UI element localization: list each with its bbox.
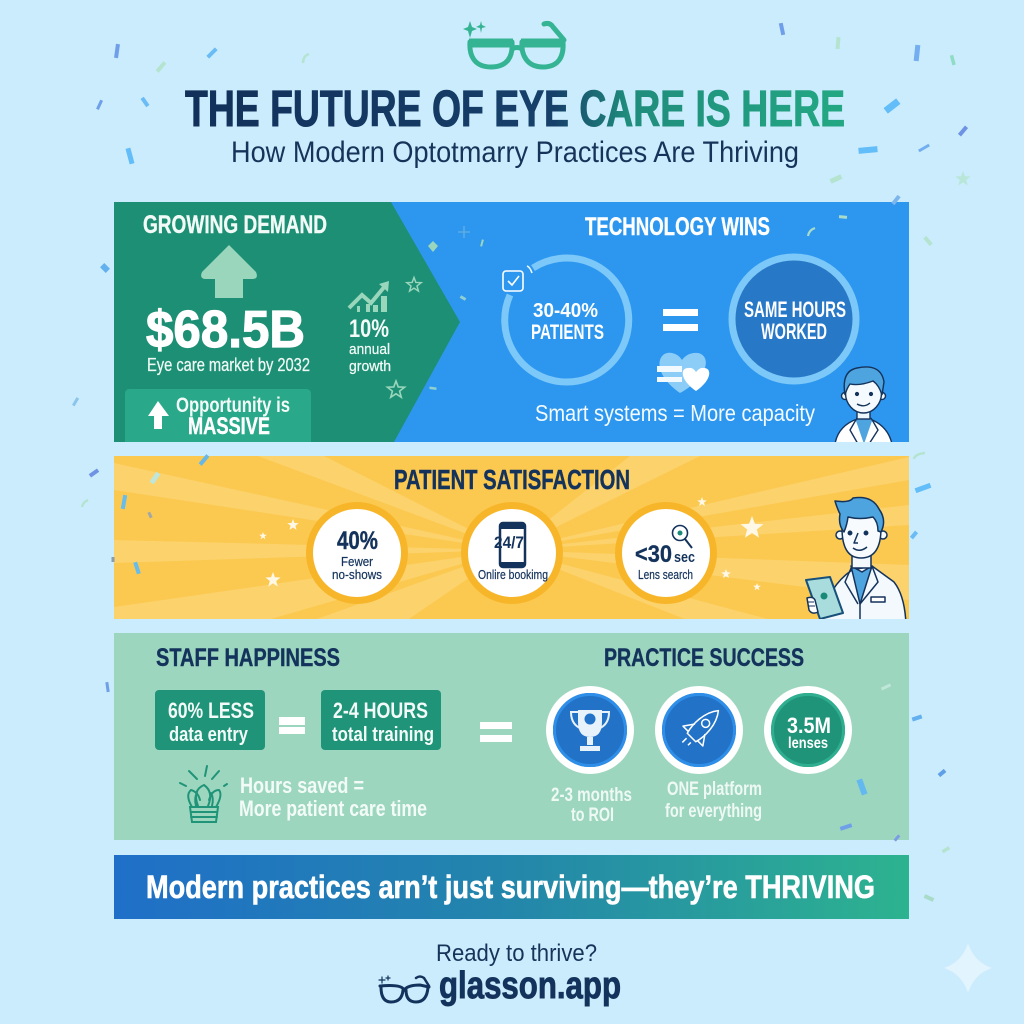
stat box: 60% less data entry [155, 690, 265, 750]
caption: one platform: for everything [665, 801, 762, 822]
equals sign [279, 717, 305, 734]
caption: months to ROI: to ROI [571, 805, 614, 826]
stat: market size: $68.5B [146, 301, 305, 359]
stat circle: online booking: 24/7 [494, 533, 524, 552]
caption: market by 2032: Eye care market by 2032 [147, 355, 310, 375]
icon: outline stars [387, 278, 421, 397]
equals sign [480, 722, 512, 742]
caption: months to ROI [551, 785, 632, 826]
circle: same hours worked [732, 257, 856, 381]
footer prompt: Ready to thrive? [436, 940, 597, 967]
heading: patient satisfaction: PATIENT SATISFACTION [394, 464, 630, 495]
callout: opportunity is massive [125, 389, 311, 442]
stat circle: lens search [618, 506, 714, 600]
circle: same hours worked: WORKED [761, 319, 827, 344]
icon: rocket badge [658, 690, 740, 770]
caption: one platform: ONE platform [667, 779, 762, 800]
equals sign [663, 309, 698, 331]
stat box: 60% less data entry: data entry [169, 724, 249, 746]
caption: months to ROI: 2-3 months [551, 785, 632, 806]
stat box: total training: 2-4 HOURS [333, 698, 428, 723]
stat: annual growth [349, 315, 391, 375]
heading: growing demand: GROWING DEMAND [143, 211, 327, 239]
panel: growing demand and technology wins [114, 202, 909, 444]
circle: 30-40% patients [503, 258, 629, 382]
panel: technology wins background [114, 202, 909, 442]
decorative sparkle [944, 943, 992, 993]
caption: one platform [665, 779, 762, 822]
panel: growing demand chevron [114, 202, 460, 442]
icon: footer glasses [379, 976, 429, 1002]
stat circle: lens search: Lens search [638, 567, 693, 582]
caption: hours saved: Hours saved = [240, 773, 364, 798]
panel: staff happiness and practice success [114, 633, 909, 840]
stat badge: 3.5M lenses: lenses [788, 735, 828, 752]
stat badge: 3.5M lenses [768, 690, 848, 770]
glasses logo icon [463, 21, 564, 67]
sunburst rays [114, 456, 909, 625]
heading: technology wins: TECHNOLOGY WINS [585, 213, 770, 241]
caption: hours saved: More patient care time [239, 796, 427, 821]
stat circle: online booking [464, 506, 560, 600]
stat box: total training [321, 690, 441, 750]
confetti [72, 23, 968, 902]
heading: practice success: PRACTICE SUCCESS [604, 644, 804, 672]
stat circle: lens search: <30 [635, 541, 672, 568]
stat: annual growth: annual [349, 341, 390, 358]
banner: thriving message [114, 855, 909, 919]
caption: smart systems: Smart systems = More capacity [535, 400, 815, 426]
stat circle: online booking: Onlire bookimg [478, 567, 548, 582]
subtitle: How Modern Optotmarry Practices Are Thriving [231, 136, 799, 169]
stat circle: fewer no-shows [310, 506, 404, 600]
footer brand: glasson.app [439, 965, 621, 1007]
stat box: total training: total training [332, 724, 434, 746]
stat: annual growth: 10% [349, 315, 389, 343]
illustration: doctor with tablet [806, 497, 906, 625]
circle: same hours worked: SAME HOURS [744, 297, 846, 322]
panel background [114, 456, 909, 619]
icon: up arrow [201, 245, 257, 298]
callout: opportunity is massive: Opportunity is [176, 394, 290, 417]
panel background [114, 633, 909, 840]
circle: 30-40% patients: PATIENTS [531, 321, 604, 344]
icon: small doctor [835, 367, 892, 444]
decorative stars [259, 497, 763, 590]
stat: annual growth: growth [349, 358, 391, 375]
callout: opportunity is massive: MASSIVE [188, 413, 270, 440]
banner: thriving message: Modern practices arn’t just surviving—they’re THRIVING [146, 869, 875, 905]
icon: celebrating plant pot [180, 766, 227, 822]
icon: trophy badge [550, 690, 630, 770]
caption: hours saved [239, 773, 427, 821]
circle: 30-40% patients: 30-40% [533, 300, 598, 322]
stat badge: 3.5M lenses: 3.5M [787, 713, 831, 738]
heading: staff happiness: STAFF HAPPINESS [156, 644, 340, 672]
stat circle: fewer no-shows: no-shows [332, 567, 382, 582]
stat circle: fewer no-shows: Fewer [341, 554, 374, 569]
stat box: 60% less data entry: 60% LESS [168, 698, 254, 723]
stat circle: lens search: sec [674, 549, 695, 566]
stat circle: fewer no-shows: 40% [337, 527, 378, 555]
icon: growth chart [349, 281, 389, 312]
decorative star [955, 171, 971, 185]
icon: hearts and equals [657, 353, 709, 393]
panel: patient satisfaction [114, 456, 909, 625]
